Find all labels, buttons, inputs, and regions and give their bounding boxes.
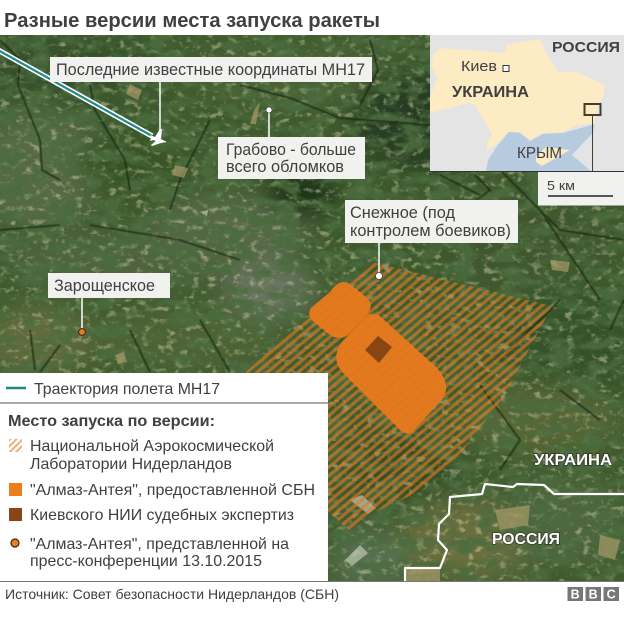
legend panel <box>0 373 328 581</box>
legend: hatched area <box>9 438 274 473</box>
legend: orange point <box>11 536 289 570</box>
label: Crimea: КРЫМ <box>517 145 562 162</box>
callout: Snizhne: контролем боевиков) <box>350 222 511 240</box>
brown launch area: Kyiv forensic institute <box>365 336 392 363</box>
title: Разные версии места запуска ракеты <box>4 10 380 32</box>
BBC logo <box>568 587 619 602</box>
orange launch area: Almaz-Antey, north block <box>309 282 371 338</box>
callout: last known coordinates <box>50 57 372 135</box>
label: Ukraine on map: УКРАИНА <box>534 452 612 469</box>
callout: Zaroshchenske <box>48 273 170 335</box>
MH17 flight path <box>0 50 152 136</box>
callout: Grabovo: всего обломков <box>226 158 344 176</box>
BBC logo: B <box>589 588 598 602</box>
legend: brown area: Киевского НИИ судебных экспертиз <box>30 507 294 524</box>
Russia-Ukraine border <box>405 484 624 581</box>
inset: Black Sea <box>486 124 595 172</box>
dark gullies <box>0 40 624 470</box>
callout: last known coordinates: Последние известные координаты МН17 <box>56 61 365 79</box>
BBC logo: B <box>571 588 580 602</box>
label: Russia on map: РОССИЯ <box>492 531 560 548</box>
legend: hatched area: Национальной Аэрокосмической <box>30 438 274 455</box>
label: Kyiv: Киев <box>461 58 497 75</box>
legend: hatched area: Лаборатории Нидерландов <box>30 456 232 473</box>
map scale <box>538 172 624 206</box>
inset: Crimea <box>536 147 570 166</box>
source: Источник: Совет безопасности Нидерландов (СБН) <box>5 586 339 602</box>
callout: Snizhne: Снежное (под <box>350 204 455 222</box>
label: Russia: РОССИЯ <box>552 39 620 56</box>
legend heading: Место запуска по версии: <box>8 413 215 430</box>
locator rectangle and leader <box>584 104 600 171</box>
BBC logo: C <box>607 588 616 602</box>
map scale: 5 км <box>547 178 575 193</box>
orange launch area: Almaz-Antey, main block <box>336 314 446 434</box>
legend: orange point: "Алмаз-Антея", представленной на <box>30 536 289 553</box>
callout: Zaroshchenske: Зарощенское <box>54 277 155 295</box>
label: Ukraine: УКРАИНА <box>452 84 529 101</box>
callout: Grabovo: Грабово - больше <box>226 141 356 159</box>
icon: plane <box>150 129 167 146</box>
legend: orange area: "Алмаз-Антея", предоставленной СБН <box>30 482 315 499</box>
icon: Kyiv marker <box>503 66 509 72</box>
callout: Snizhne <box>345 200 518 279</box>
legend: flight path: Траектория полета МН17 <box>34 381 220 398</box>
legend: orange point: пресс-конференции 13.10.2015 <box>30 553 262 570</box>
inset locator map <box>430 35 624 172</box>
callout: Grabovo <box>218 107 365 179</box>
inset: Ukraine territory <box>430 39 605 150</box>
hatched launch area: Netherlands Aerospace Laboratory <box>220 262 552 530</box>
